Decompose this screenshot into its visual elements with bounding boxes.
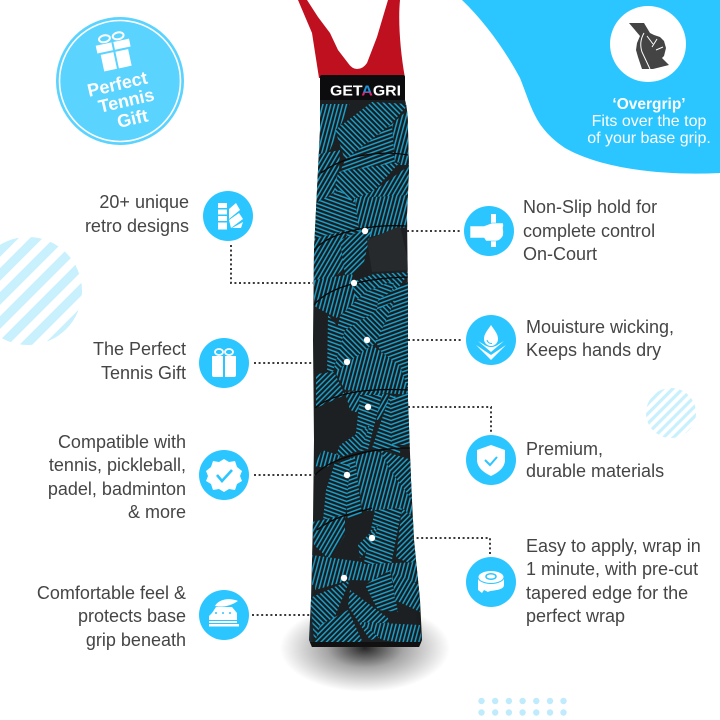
top right blue blob [462, 0, 720, 174]
text [526, 536, 701, 626]
connector: comfort [252, 614, 310, 616]
text [85, 192, 189, 236]
icon: shield [466, 435, 516, 485]
connector: designs [231, 245, 313, 283]
connector: non-slip [407, 230, 461, 232]
connector: compatible [254, 474, 315, 476]
text: complete control [523, 221, 655, 241]
text: tapered edge for the [526, 583, 688, 603]
text: Keeps hands dry [526, 340, 661, 360]
text: grip beneath [86, 630, 186, 650]
text: overgrip description [587, 96, 711, 147]
text: The Perfect [93, 339, 186, 359]
text: 1 minute, with pre-cut [526, 559, 698, 579]
icon: tape roll [466, 557, 516, 607]
feature: non-slip [464, 197, 657, 264]
text: 20+ unique [99, 192, 189, 212]
handle shadow [280, 604, 450, 692]
connector: moisture [408, 339, 463, 341]
feature: moisture [466, 315, 674, 365]
text [526, 439, 664, 481]
badge: perfect tennis gift [56, 17, 184, 145]
badge text: Tennis [96, 84, 156, 117]
connector: easy to apply [412, 538, 490, 555]
text: retro designs [85, 216, 189, 236]
grip handle [309, 100, 422, 647]
text: Tennis Gift [101, 363, 186, 383]
text: durable materials [526, 461, 664, 481]
badge text [85, 67, 160, 137]
feature: comfort [37, 583, 249, 650]
icon: check badge [199, 450, 249, 500]
icon: water drop on layers [466, 315, 516, 365]
feature: retro designs [85, 191, 253, 241]
dot grid [478, 698, 567, 716]
text: perfect wrap [526, 606, 625, 626]
icon: hand holding handle [464, 206, 514, 256]
text: Compatible with [58, 432, 186, 452]
icon: feather on mattress [199, 590, 249, 640]
text: overgrip description: Fits over the top [592, 113, 706, 130]
text: & more [128, 502, 186, 522]
racket throat [298, 0, 405, 78]
text: Easy to apply, wrap in [526, 536, 701, 556]
feature: gift [93, 338, 249, 388]
icon: badge gift [94, 30, 135, 72]
text [48, 432, 186, 522]
connector: premium [408, 407, 491, 433]
connector: gift [254, 362, 314, 364]
feature: compatible [48, 432, 249, 522]
text: Premium, [526, 439, 603, 459]
striped circle left [0, 237, 82, 345]
callout: overgrip [587, 6, 711, 147]
racket [298, 0, 405, 103]
grip marker dots [341, 228, 375, 581]
striped circle right [646, 388, 696, 438]
text: padel, badminton [48, 479, 186, 499]
icon: gift [199, 338, 249, 388]
text: overgrip description: of your base grip. [587, 130, 711, 147]
icon: hand gripping band [610, 6, 686, 82]
text: Mouisture wicking, [526, 317, 674, 337]
feature: premium [466, 435, 664, 485]
text [523, 197, 657, 264]
brand label: GETAGRI [330, 84, 401, 100]
badge text: Perfect [85, 68, 149, 101]
grip pattern patches [310, 102, 422, 646]
text: overgrip description: ‘Overgrip’ [612, 96, 686, 113]
text [37, 583, 186, 650]
text [93, 339, 186, 383]
text: protects base [78, 606, 186, 626]
text: tennis, pickleball, [49, 455, 186, 475]
wrap edges [314, 153, 410, 530]
text: Comfortable feel & [37, 583, 186, 603]
text [526, 317, 674, 360]
feature: easy to apply [466, 536, 701, 626]
text: Non-Slip hold for [523, 197, 657, 217]
icon: swatch fan [203, 191, 253, 241]
text: On-Court [523, 244, 597, 264]
badge text: Gift [115, 105, 150, 132]
